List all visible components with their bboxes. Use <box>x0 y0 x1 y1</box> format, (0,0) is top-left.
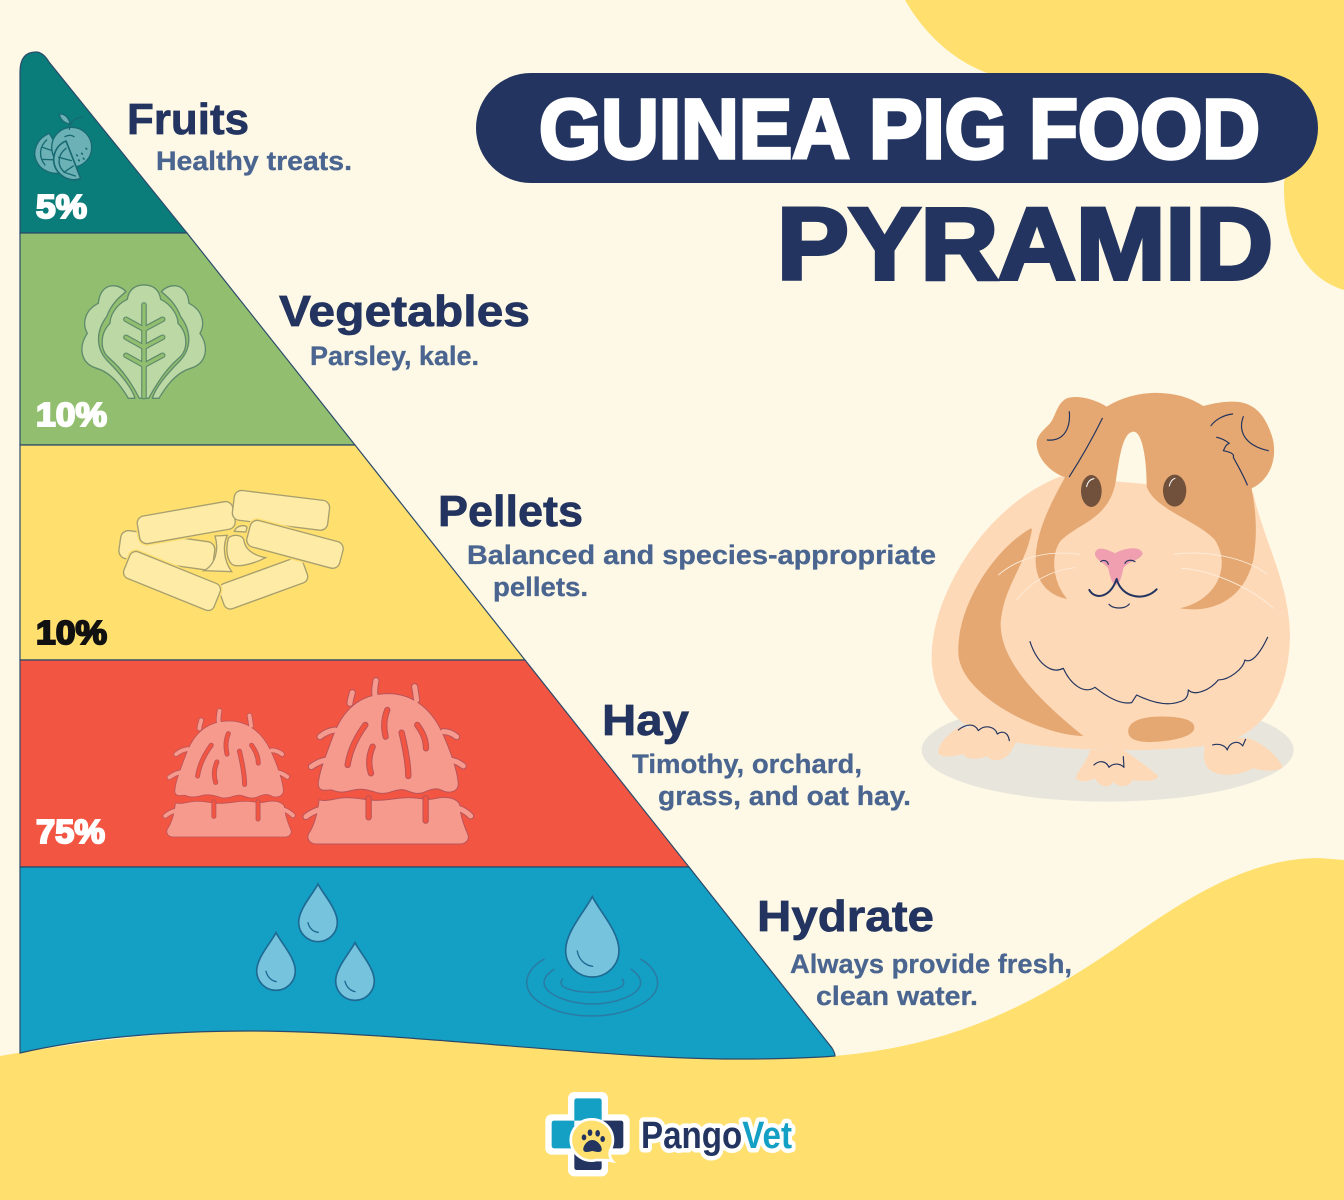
text block: pellets: Balanced and species-appropriate <box>467 540 936 570</box>
title line 2: PYRAMID <box>777 187 1273 301</box>
front feet <box>938 727 1283 786</box>
text block: hydrate: Hydrate <box>757 892 934 941</box>
text block: fruits: Healthy treats. <box>156 146 352 176</box>
icon: pellets <box>118 490 345 613</box>
text block: pellets <box>438 487 936 602</box>
icon: citrus fruits <box>35 114 92 180</box>
text block: vegetables <box>279 287 530 371</box>
text block: hay: grass, and oat hay. <box>658 781 911 811</box>
percentage: hay: 75% <box>36 813 105 850</box>
band: pellets <box>20 445 525 660</box>
illustration: guinea pig <box>922 393 1294 802</box>
background wave: bottom <box>0 858 1344 1200</box>
text block: hay: Timothy, orchard, <box>632 749 862 779</box>
percentage: vegetables: 10% <box>36 396 107 433</box>
panel: food pyramid <box>20 52 835 1059</box>
percentage: pellets: 10% <box>36 614 107 651</box>
text block: fruits <box>127 95 352 176</box>
belly patch <box>1128 717 1194 742</box>
side patch <box>958 528 1083 736</box>
percentage: fruits: 5% <box>36 188 87 225</box>
whiskers <box>998 553 1273 608</box>
head and ears <box>1036 393 1274 609</box>
ground shadow <box>922 698 1294 802</box>
title <box>476 73 1318 301</box>
facial lines <box>958 412 1268 767</box>
title pill <box>476 73 1318 183</box>
text block: hydrate: clean water. <box>816 981 978 1011</box>
icon: water drop with ripples <box>527 897 658 1016</box>
text block: hydrate: Always provide fresh, <box>790 949 1072 979</box>
text block: hydrate <box>757 892 1072 1011</box>
title line 1: GUINEA PIG FOOD <box>539 82 1260 176</box>
logo wordmark: PangoVet <box>641 1115 792 1157</box>
text block: vegetables: Parsley, kale. <box>310 341 479 371</box>
logo icon: cross with paw bubble <box>552 1098 623 1170</box>
nose <box>1095 548 1143 585</box>
body <box>932 477 1290 750</box>
icon: hay small <box>165 711 293 835</box>
icon: lettuce leaf <box>82 285 205 398</box>
band: vegetables <box>20 233 355 445</box>
background blob: top right <box>905 0 1344 290</box>
text block: pellets: pellets. <box>493 572 588 602</box>
eyes <box>1081 475 1186 507</box>
text block: hay: Hay <box>602 696 690 745</box>
text block: hay <box>602 696 911 811</box>
icon: hay large <box>306 681 471 841</box>
text block: pellets: Pellets <box>438 487 583 536</box>
text block: vegetables: Vegetables <box>279 287 530 336</box>
text block: fruits: Fruits <box>127 95 249 144</box>
logo: PangoVet <box>552 1098 792 1170</box>
band: hydrate <box>20 867 835 1059</box>
icon: three water drops <box>257 884 374 1000</box>
band: fruits <box>20 52 187 233</box>
band: hay <box>20 660 689 867</box>
